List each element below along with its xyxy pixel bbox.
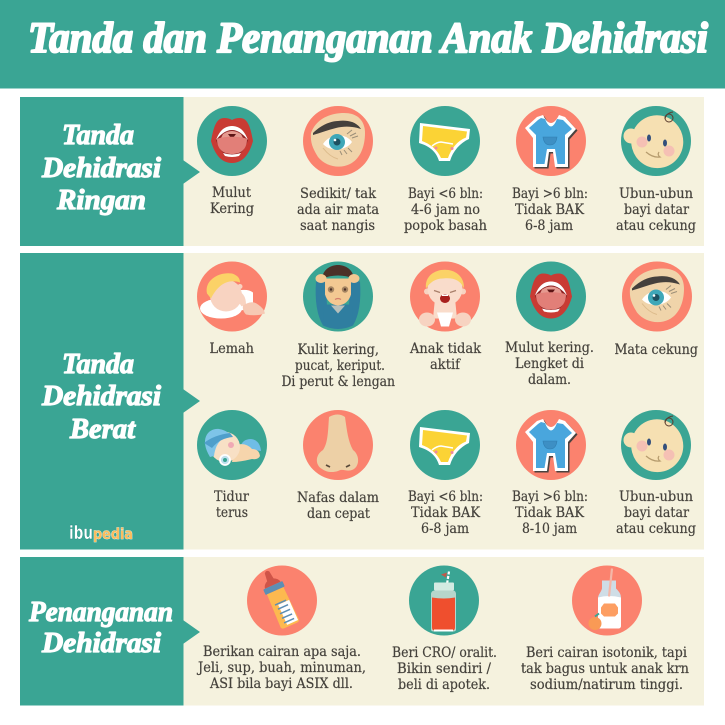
label: ubun-ubun: atau cekung: [616, 218, 696, 234]
header band: [0, 0, 725, 88]
label: mulut kering lengket: [505, 340, 594, 388]
panel: penanganan dehidrasi: [20, 557, 704, 706]
label: tidak bak 6-8: Bayi <6 bln:: [408, 489, 483, 505]
icon: juice jar: [409, 566, 479, 636]
label: kulit kering: [282, 342, 395, 390]
heading: berat: Dehidrasi: [41, 381, 161, 412]
label: berikan cairan: Jeli, sup, buah, minuman,: [196, 660, 366, 676]
label: berikan cairan: [196, 644, 366, 692]
label: mulut kering: [210, 185, 254, 217]
label: mulut kering: Kering: [210, 201, 254, 217]
label: air mata: [297, 186, 379, 234]
label: tidak bak: [512, 186, 588, 234]
label: tidur terus: Tidur: [214, 489, 249, 505]
heading: penanganan: Penanganan: [28, 597, 173, 628]
icon: crying baby: [410, 262, 480, 332]
label: nafas dalam: [297, 490, 379, 522]
icon: baby with pacifier: [197, 410, 267, 480]
label: anak tidak aktif: Anak tidak: [409, 341, 481, 357]
icon: romper: [516, 410, 586, 480]
title: Tanda dan Penanganan Anak Dehidrasi: [28, 15, 708, 62]
label: ubun-ubun: bayi datar: [624, 202, 689, 218]
label: beri cro: Beri CRO/ oralit.: [392, 645, 497, 661]
label: ubun-ubun: atau cekung: [616, 521, 696, 537]
heading: ringan: Ringan: [56, 185, 146, 216]
logo: ibupedia: ibu: [69, 522, 93, 544]
panel: tanda dehidrasi ringan: [20, 97, 704, 246]
label: ubun-ubun: Ubun-ubun: [619, 489, 693, 505]
label: beri cro: [392, 645, 497, 693]
label: mulut kering lengket: Mulut kering.: [505, 340, 594, 356]
label: tidak bak 8-10: Bayi >6 bln:: [512, 489, 588, 505]
label: nafas dalam: dan cepat: [307, 506, 370, 522]
label: tidak bak 8-10: Tidak BAK: [515, 505, 584, 521]
label: kulit kering: pucat, keriput.: [295, 358, 385, 374]
icon: eye: [622, 262, 692, 332]
label: popok basah: popok basah: [404, 218, 487, 234]
label: tidak bak 6-8: 6-8 jam: [421, 521, 469, 537]
icon: baby face: [621, 410, 691, 480]
label: beri isotonik: [521, 645, 689, 693]
label: kulit kering: Di perut & lengan: [282, 374, 395, 390]
label: beri isotonik: Beri cairan isotonik, tapi: [526, 645, 687, 661]
label: tidak bak 8-10: [512, 489, 588, 537]
heading: ringan: [41, 120, 161, 216]
label: tidak bak 6-8: [408, 489, 483, 537]
label: air mata: Sedikit/ tak: [300, 186, 376, 202]
heading: berat: Berat: [69, 414, 136, 445]
heading: ringan: Tanda: [62, 120, 134, 151]
heading: penanganan: Dehidrasi: [41, 628, 161, 659]
label: beri isotonik: sodium/natirum tinggi.: [530, 677, 683, 693]
icon: nose: [303, 410, 373, 480]
label: tidak bak: 6-8 jam: [525, 218, 573, 234]
heading: berat: Tanda: [62, 349, 134, 380]
icon: sleeping baby: [197, 262, 267, 332]
label: beri isotonik: tak bagus untuk anak krn: [521, 661, 689, 677]
label: mata cekung: Mata cekung: [614, 342, 698, 358]
label: kulit kering: Kulit kering,: [298, 342, 379, 358]
label: tidur terus: terus: [216, 505, 248, 521]
label: anak tidak aktif: [409, 341, 481, 373]
label: air mata: ada air mata: [297, 202, 379, 218]
icon: baby bottle: [247, 566, 317, 636]
label: nafas dalam: Nafas dalam: [297, 490, 379, 506]
label: tidak bak 8-10: 8-10 jam: [522, 521, 577, 537]
icon: eye: [303, 106, 373, 176]
label: popok basah: 4-6 jam no: [411, 202, 480, 218]
icon: mouth: [197, 106, 267, 176]
label: mulut kering: Mulut: [212, 185, 251, 201]
label: berikan cairan: Berikan cairan apa saja.: [203, 644, 361, 660]
label: mulut kering lengket: Lengket di: [515, 356, 584, 372]
label: popok basah: Bayi <6 bln:: [408, 186, 483, 202]
label: tidur terus: [214, 489, 249, 521]
heading: berat: [41, 349, 161, 445]
icon: tired boy: [303, 262, 373, 332]
panel: tanda dehidrasi berat: [20, 253, 704, 550]
label: lemah: Lemah: [210, 341, 254, 357]
heading: ringan: Dehidrasi: [41, 153, 161, 184]
icon: diaper: [410, 106, 480, 176]
label: ubun-ubun: [616, 489, 696, 537]
label: ubun-ubun: bayi datar: [624, 505, 689, 521]
label: ubun-ubun: [616, 186, 696, 234]
heading: penanganan: [28, 597, 173, 659]
icon: mouth: [516, 262, 586, 332]
label: tidak bak: Tidak BAK: [515, 202, 584, 218]
label: mulut kering lengket: dalam.: [528, 372, 571, 388]
label: tidak bak: Bayi >6 bln:: [512, 186, 588, 202]
logo: ibupedia: [69, 522, 133, 544]
icon: milk bottle: [572, 566, 642, 636]
label: air mata: saat nangis: [300, 218, 375, 234]
label: beri cro: beli di apotek.: [398, 677, 490, 693]
icon: baby face: [621, 106, 691, 176]
label: anak tidak aktif: aktif: [430, 357, 462, 373]
label: berikan cairan: ASI bila bayi ASIX dll.: [209, 676, 353, 692]
logo: ibupedia: pedia: [93, 525, 133, 543]
label: ubun-ubun: Ubun-ubun: [619, 186, 693, 202]
label: tidak bak 6-8: Tidak BAK: [411, 505, 480, 521]
label: beri cro: Bikin sendiri /: [397, 661, 491, 677]
icon: diaper: [410, 410, 480, 480]
icon: romper: [516, 106, 586, 176]
label: popok basah: [404, 186, 487, 234]
